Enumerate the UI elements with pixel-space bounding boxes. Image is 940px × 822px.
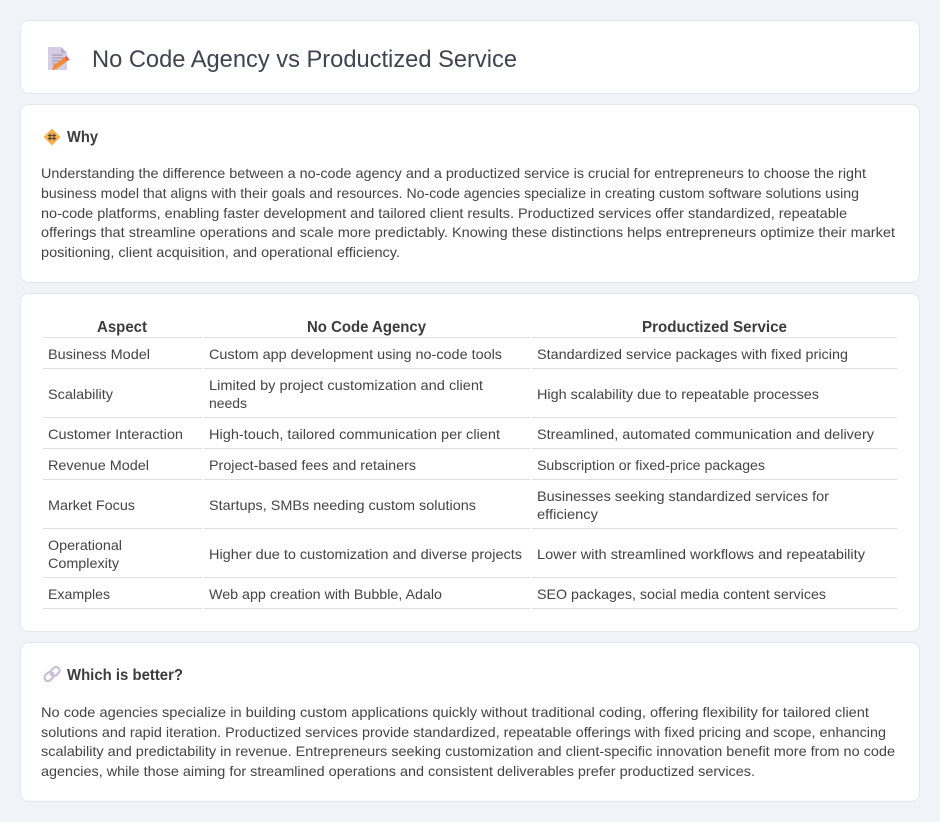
text block: verdict paragraph: agencies, while those aiming for streamlined operations and consistent deliverables prefer productized services. [41, 763, 755, 779]
row: scalability: needs [209, 395, 247, 411]
text block: why paragraph: offerings that streamline operations and scale more predictably. Knowing these distinctions helps entrepreneurs optimize their market [41, 224, 895, 240]
table header: No Code Agency [307, 319, 426, 336]
row: business model [48, 346, 848, 362]
heading: why: Why [67, 129, 98, 146]
row: operational complexity: Lower with streamlined workflows and repeatability [537, 546, 865, 562]
text block: why paragraph: Understanding the difference between a no-code agency and a productized service is crucial for entrepreneurs to choose the right [41, 165, 866, 181]
row: revenue model: Subscription or fixed-price packages [537, 457, 765, 473]
row: market focus: Startups, SMBs needing custom solutions [209, 497, 476, 513]
text block: verdict paragraph: solutions and rapid iteration. Productized services provide standardized, repeatable offerings with fixed pricing and scope, enhancing [41, 724, 886, 740]
table header: Aspect [97, 319, 148, 336]
title: No Code Agency vs Productized Service [92, 46, 517, 73]
row: operational complexity: Complexity [48, 555, 119, 571]
row: market focus: Market Focus [48, 497, 135, 513]
row: scalability [48, 377, 819, 411]
row: examples: Examples [48, 586, 110, 602]
heading: which is better: Which is better? [67, 667, 183, 684]
panel: comparison table [20, 294, 920, 632]
text block: why paragraph [41, 165, 895, 260]
row: customer interaction: Streamlined, automated communication and delivery [537, 426, 874, 442]
row: operational complexity: Higher due to customization and diverse projects [209, 546, 522, 562]
icon: orange diamond [44, 128, 60, 146]
text block: why paragraph: no-code platforms, enabling faster development and tailored client results. Productized services offer standardized, repeatable [41, 205, 847, 221]
row: operational complexity [48, 537, 865, 571]
row: customer interaction: High-touch, tailored communication per client [209, 426, 500, 442]
row: business model: Standardized service packages with fixed pricing [537, 346, 848, 362]
icon: document with pencil [48, 47, 70, 70]
row: revenue model [48, 457, 765, 473]
row: revenue model: Project-based fees and retainers [209, 457, 416, 473]
panel: title header [20, 20, 920, 94]
table header: Productized Service [642, 319, 787, 336]
row: examples: Web app creation with Bubble, Adalo [209, 586, 442, 602]
row: scalability: Limited by project customization and client [209, 377, 483, 393]
text block: why paragraph: business model that aligns with their goals and resources. No-code agencies specialize in creating custom software solutions using [41, 185, 859, 201]
row: customer interaction: Customer Interaction [48, 426, 183, 442]
row: examples: SEO packages, social media content services [537, 586, 826, 602]
row: scalability: High scalability due to repeatable processes [537, 386, 819, 402]
row: business model: Custom app development using no-code tools [209, 346, 502, 362]
row: market focus: efficiency [537, 506, 598, 522]
row: market focus [48, 488, 829, 522]
row: business model: Business Model [48, 346, 150, 362]
table header [97, 319, 787, 336]
text block: verdict paragraph [41, 704, 895, 779]
row: scalability: Scalability [48, 386, 113, 402]
row: operational complexity: Operational [48, 537, 122, 553]
panel: why [20, 104, 920, 282]
row: customer interaction [48, 426, 874, 442]
row: examples [48, 586, 826, 602]
panel: which is better [20, 642, 920, 802]
row: market focus: Businesses seeking standardized services for [537, 488, 829, 504]
text block: why paragraph: positioning, client acquisition, and operational efficiency. [41, 244, 400, 260]
icon: chain link [43, 665, 61, 683]
text block: verdict paragraph: No code agencies specialize in building custom applications quickly without traditional coding, offering flexibility for tailored client [41, 704, 869, 720]
row: revenue model: Revenue Model [48, 457, 149, 473]
text block: verdict paragraph: scalability and predictability in revenue. Entrepreneurs seeking customization and client-specific innovation benefit more from no code [41, 743, 895, 759]
